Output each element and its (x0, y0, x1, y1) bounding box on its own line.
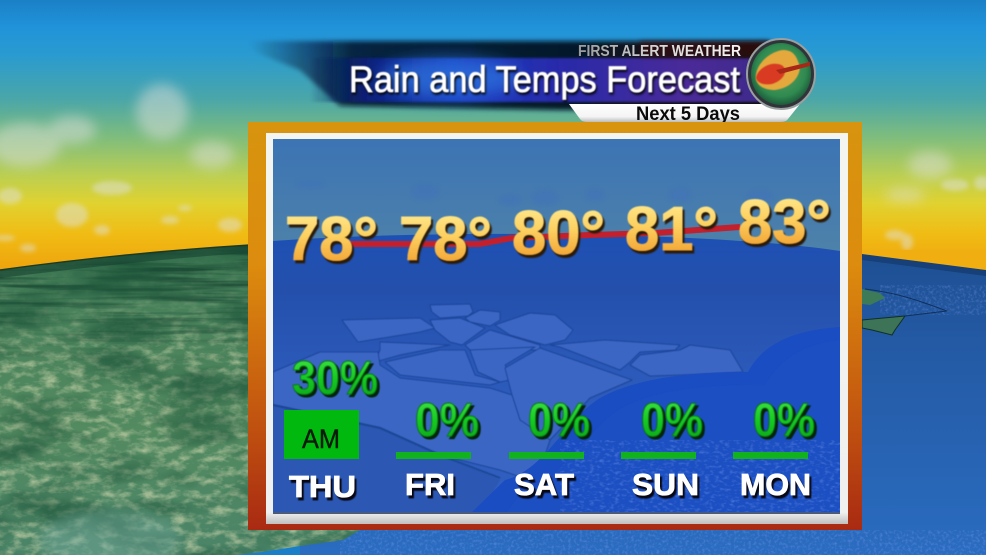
background: ocean (300, 254, 986, 555)
background: sky gradient (0, 0, 986, 275)
map: lower-left gulf (273, 421, 500, 512)
Thursday rain bar with AM label: AM (302, 424, 340, 454)
day labels (289, 467, 811, 504)
background: green land (0, 240, 360, 555)
title: Rain and Temps Forecast (349, 59, 741, 100)
map: ocean (470, 327, 840, 514)
panel white border (266, 133, 848, 524)
next 5 days tab (569, 104, 800, 125)
temperatures: 80° (512, 199, 605, 268)
rain chances (292, 351, 815, 446)
panel frame (248, 122, 862, 530)
banner background (250, 41, 780, 110)
map: state shapes (273, 304, 743, 480)
rain chances: 0% (528, 393, 590, 446)
rain chances: 0% (753, 393, 815, 446)
rain bars (396, 452, 808, 459)
Thursday rain bar with AM label (284, 410, 359, 459)
background: offshore islands (862, 289, 947, 335)
icon: radar globe (747, 39, 815, 109)
day labels: SUN (632, 467, 699, 502)
map background (273, 139, 840, 514)
day labels: SAT (514, 467, 574, 502)
background: clouds (0, 84, 986, 252)
temperatures: 78° (399, 205, 492, 274)
rain chances: 0% (641, 393, 703, 446)
forecast panel (248, 122, 862, 530)
rain chances: 30% (292, 351, 378, 404)
red temperature trend line (345, 227, 740, 244)
rain chances: 0% (415, 393, 479, 446)
day labels: THU (289, 469, 356, 504)
temperatures (285, 188, 831, 274)
temperatures: 78° (285, 205, 378, 274)
day labels: MON (740, 467, 811, 502)
day labels: FRI (405, 467, 455, 502)
title banner (250, 39, 815, 125)
temperatures: 81° (625, 195, 718, 264)
temperatures: 83° (738, 188, 831, 257)
brand label: FIRST ALERT WEATHER (578, 43, 741, 60)
next 5 days tab: Next 5 Days (636, 104, 740, 125)
